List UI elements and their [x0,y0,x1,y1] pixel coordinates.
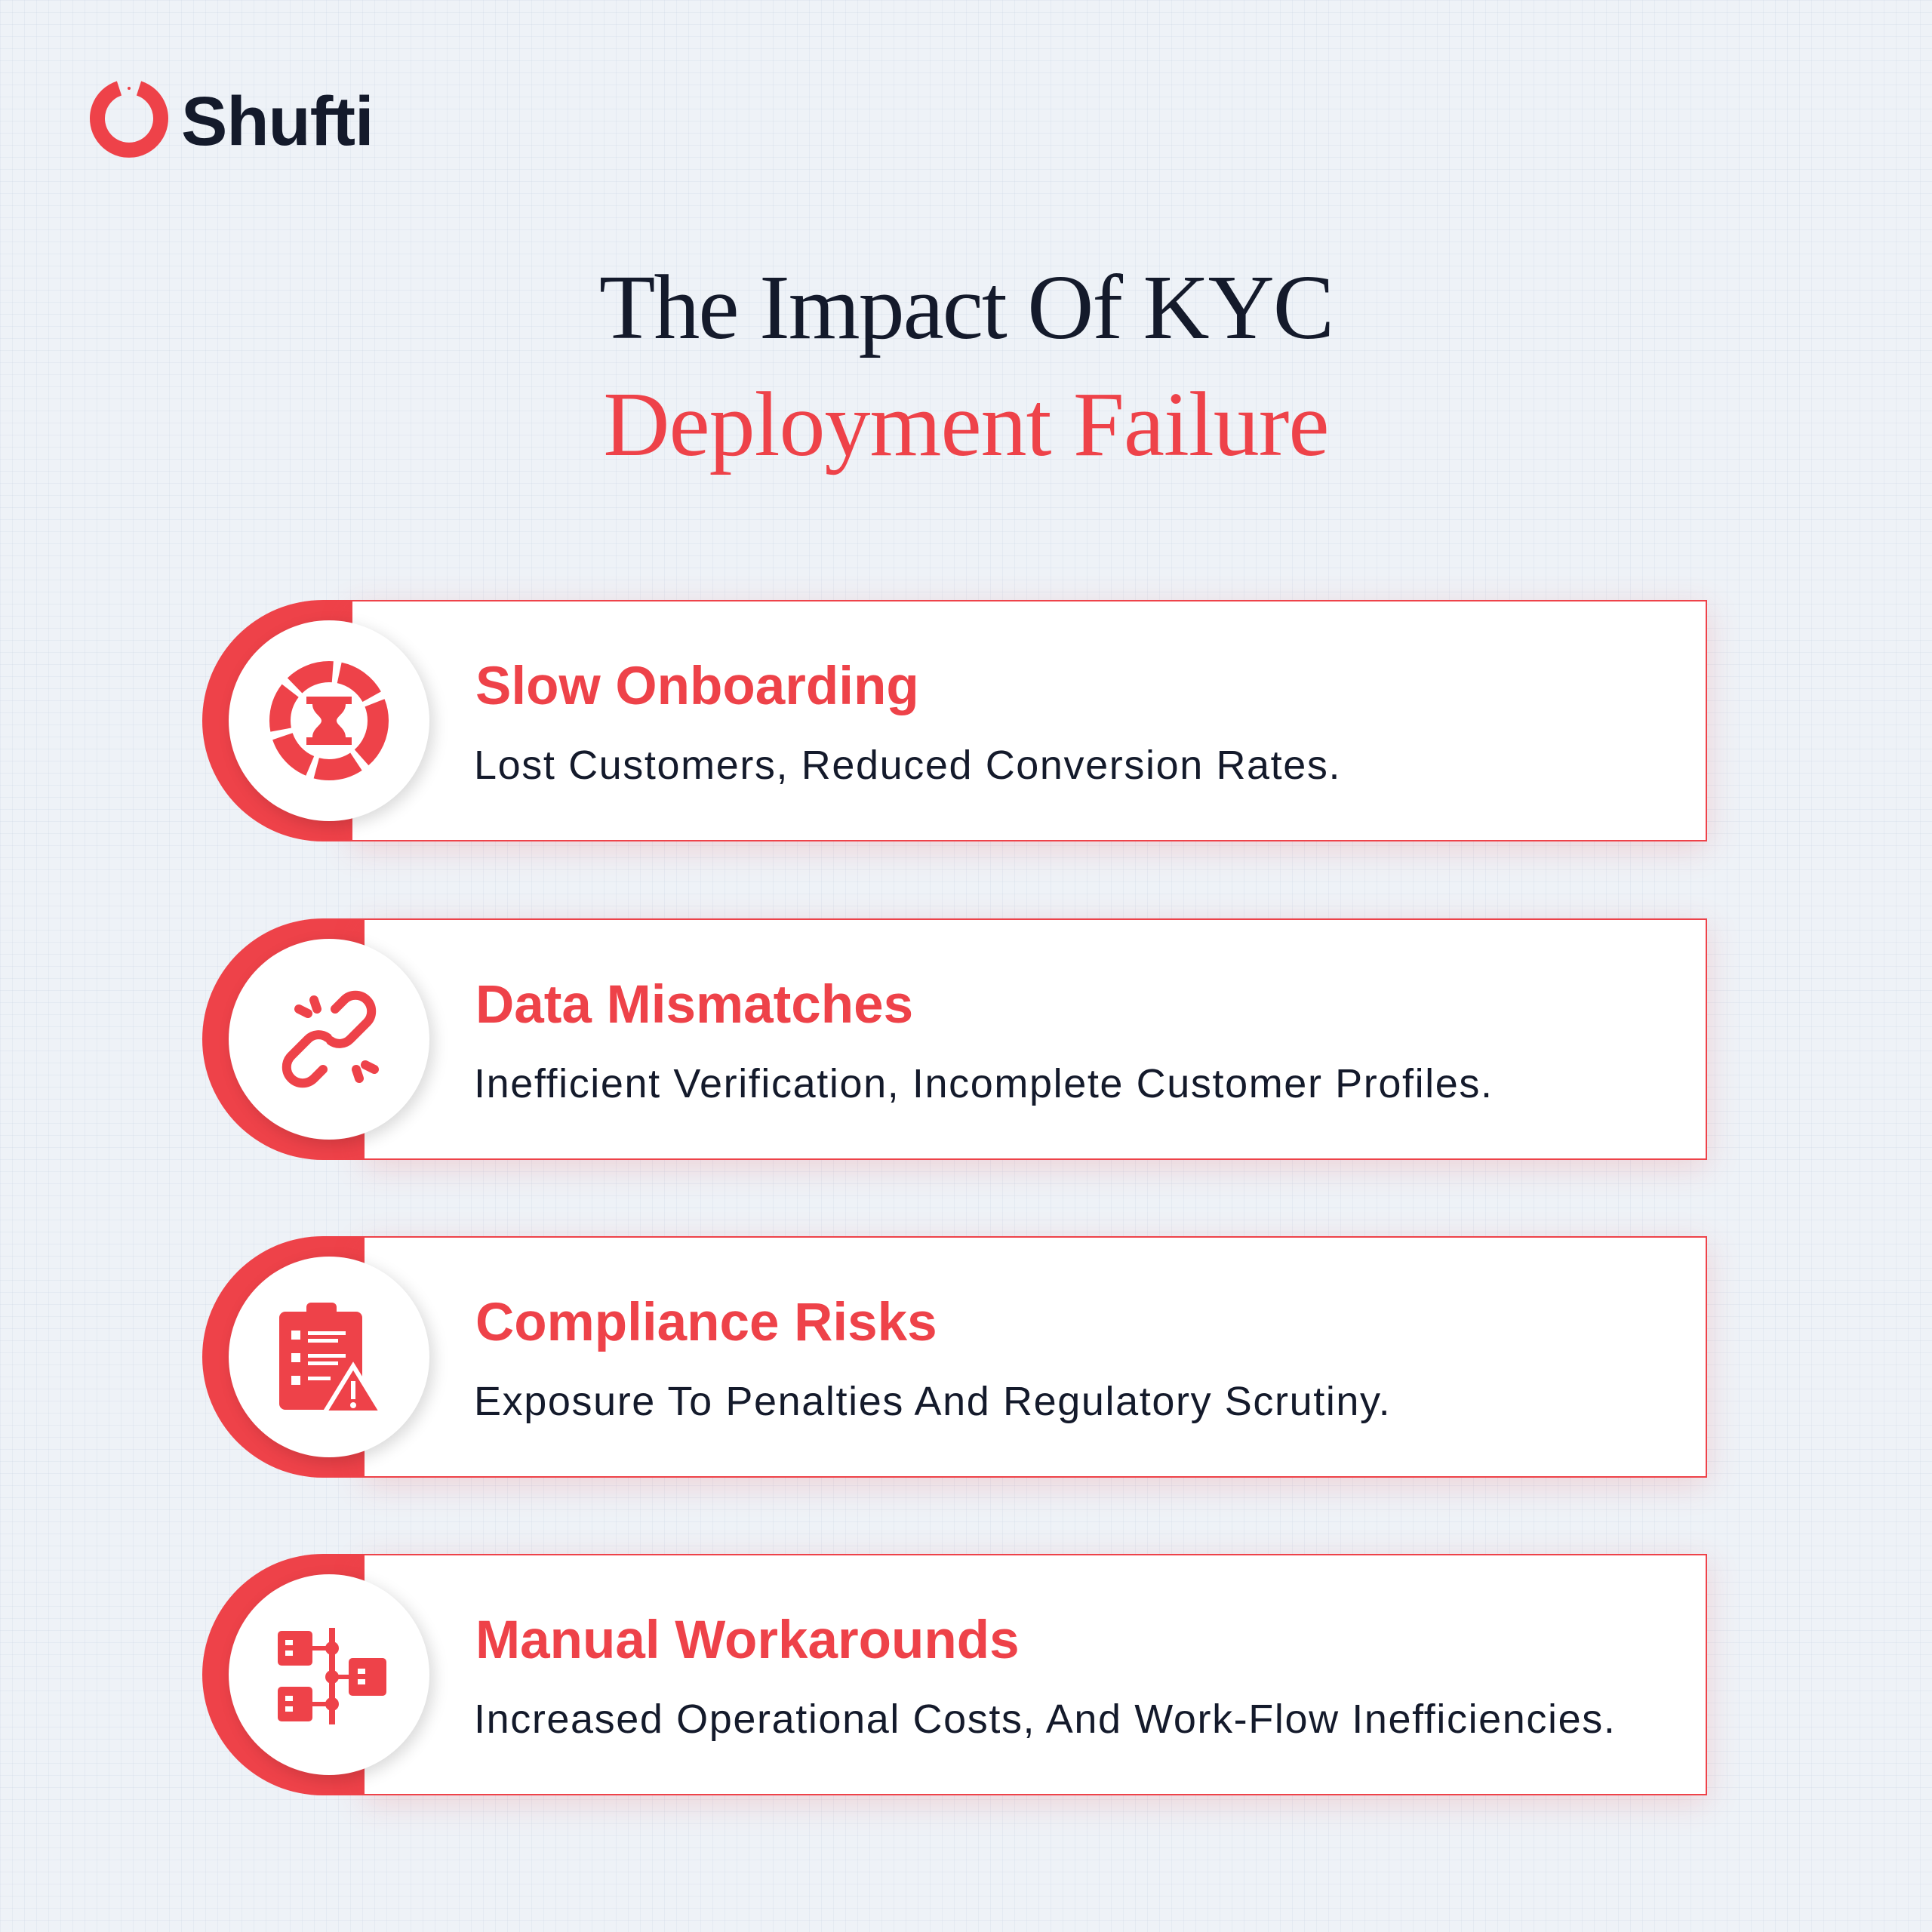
icon: hourglass timer [229,620,429,821]
card: manual workarounds: Manual Workarounds [475,1611,1020,1670]
icon: clipboard warning [229,1257,429,1457]
card: data mismatches: Inefficient Verification, Incomplete Customer Profiles. [474,1061,1494,1106]
card: compliance risks: Compliance Risks [475,1293,937,1352]
card: slow onboarding: Lost Customers, Reduced Conversion Rates. [474,743,1341,788]
card: slow onboarding [202,596,1718,860]
card: data mismatches [202,915,1718,1179]
card: manual workarounds [202,1550,1718,1814]
card: compliance risks [202,1232,1718,1497]
logo ring [90,82,168,158]
logo [90,82,374,160]
card: data mismatches: Data Mismatches [475,975,913,1035]
title: The Impact Of KYC [599,257,1333,358]
icon: broken link [229,939,429,1140]
title [599,257,1333,475]
title: Deployment Failure [603,374,1329,475]
card: slow onboarding: Slow Onboarding [475,657,919,716]
logo text: Shufti [181,83,374,160]
card: compliance risks: Exposure To Penalties And Regulatory Scrutiny. [474,1379,1391,1424]
icon: workflow [229,1574,429,1775]
card: manual workarounds: Increased Operational Costs, And Work-Flow Inefficiencies. [474,1697,1616,1742]
